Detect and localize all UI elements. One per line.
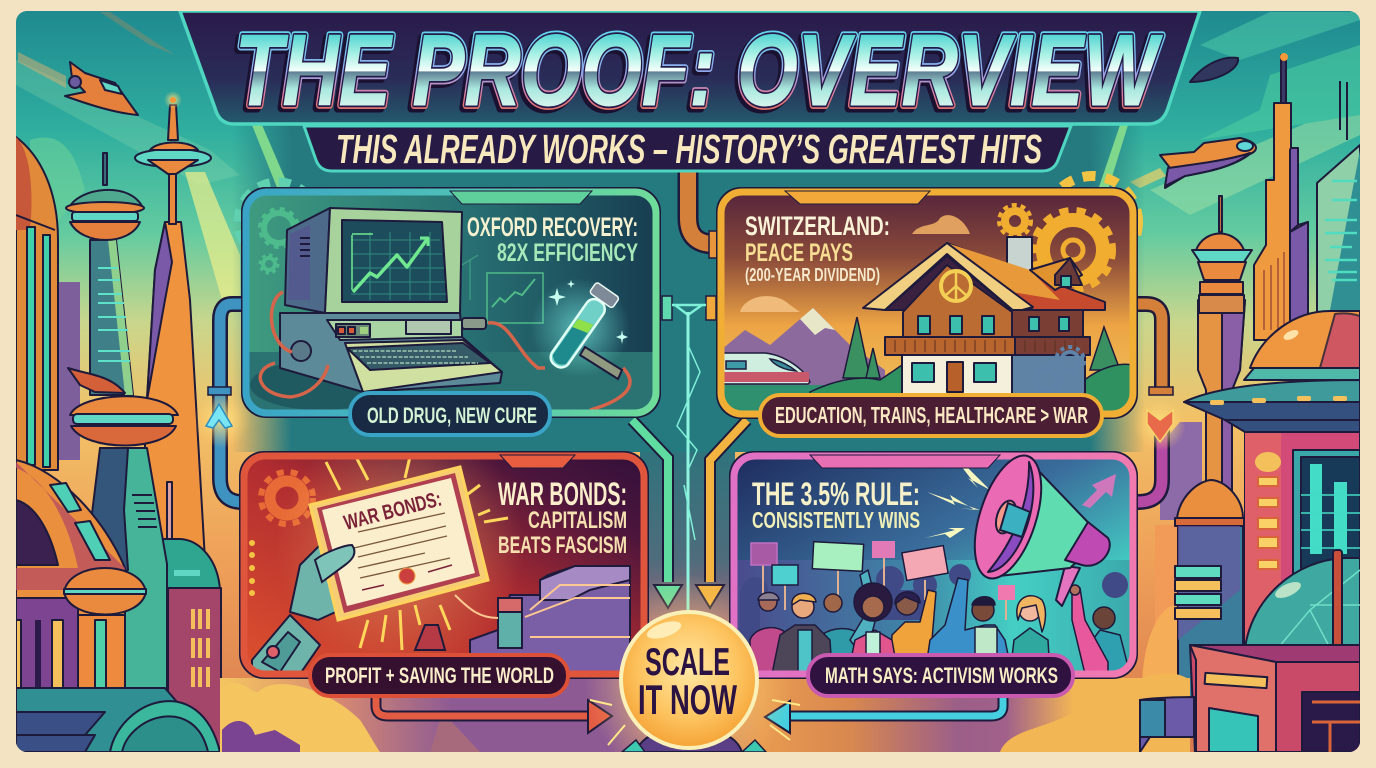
- small arrow icon: [1077, 474, 1116, 510]
- gear icons: [260, 209, 298, 273]
- caption pill: PROFIT + SAVING THE WORLD: [325, 663, 554, 688]
- spire tower: [135, 105, 211, 560]
- pole: [167, 482, 172, 540]
- computer monitor: [280, 208, 502, 392]
- frame top accent: [450, 191, 592, 204]
- small dome building: [164, 538, 222, 748]
- caption pill: MATH SAYS: ACTIVISM WORKS: [825, 663, 1058, 688]
- orb rays: [590, 700, 800, 745]
- screen chart line: [353, 238, 428, 292]
- right city: [1142, 53, 1360, 752]
- panel background: [717, 188, 1137, 418]
- computer base: [280, 313, 502, 392]
- bond certificate: [310, 467, 488, 620]
- glass dome: [1245, 549, 1360, 644]
- orb glow: [584, 575, 794, 768]
- caption pill: [760, 395, 1102, 436]
- subheading: PEACE PAYS: [745, 239, 853, 267]
- glow behind right arrow: [1134, 399, 1186, 451]
- arrow: green into orb: [632, 420, 682, 608]
- arrow: yellow into orb: [696, 420, 747, 608]
- subheading: CONSISTENTLY WINS: [752, 507, 920, 533]
- glow behind certificate: [275, 420, 525, 670]
- orb text line 2: IT NOW: [638, 676, 737, 723]
- small ufo: [1190, 58, 1238, 82]
- panel background: [242, 188, 660, 417]
- crowd background: [734, 560, 1134, 674]
- glass tower: [1317, 81, 1360, 320]
- clouds: [912, 215, 970, 234]
- certificate seal: [399, 568, 415, 584]
- vial glow: [530, 278, 630, 378]
- subheading: 82X EFFICIENCY: [497, 239, 638, 267]
- panel: War Bonds: [240, 420, 648, 696]
- subtitle banner: [304, 126, 1071, 172]
- picket signs: [751, 541, 1015, 620]
- heading: SWITZERLAND:: [745, 211, 890, 241]
- vial connector: [580, 347, 622, 379]
- subtitle banner: THIS ALREADY WORKS – HISTORY’S GREATEST HITS: [336, 126, 1042, 172]
- panel background: [730, 452, 1137, 678]
- monitor vents: [300, 238, 310, 256]
- header banner: [180, 11, 1200, 130]
- certificate lines: [354, 513, 450, 578]
- big dome saucer: [1184, 311, 1360, 432]
- panel background: [240, 452, 648, 678]
- caption pill: EDUCATION, TRAINS, HEALTHCARE > WAR: [775, 402, 1088, 428]
- frame top accent: [785, 191, 930, 204]
- orb: Scale It Now: [621, 612, 757, 748]
- ghost chart: [462, 255, 543, 323]
- people: [750, 570, 1130, 674]
- rocket ship left: [65, 62, 138, 115]
- frame top accent: [500, 455, 575, 468]
- panel frame: [721, 192, 1133, 414]
- panel frame: [246, 192, 656, 413]
- rocket ship right: [1160, 138, 1256, 188]
- orb text line 1: SCALE: [645, 641, 730, 684]
- icon: vial: [544, 282, 620, 373]
- icon: down arrow on right pipe: [1147, 410, 1173, 442]
- bottom clouds: [220, 673, 1190, 752]
- background blocks: [1160, 422, 1202, 520]
- panel: Oxford Recovery: [238, 182, 660, 435]
- teal struts: [252, 125, 1128, 190]
- plug: [462, 318, 486, 329]
- trees: [843, 317, 1120, 378]
- antenna glow: [164, 92, 182, 108]
- crowd silhouettes: [740, 564, 1128, 650]
- dots: [249, 540, 255, 596]
- pipe: left blue connector: [220, 304, 243, 502]
- sky streaks: [16, 12, 1360, 230]
- low building: [1190, 645, 1360, 752]
- keyboard: [347, 343, 490, 370]
- robot finger: [315, 545, 354, 582]
- saucer tower: [66, 153, 144, 395]
- control tower: [1192, 196, 1252, 500]
- icon: megaphone: [962, 447, 1110, 606]
- small dome building: [1175, 480, 1244, 700]
- pipe: orange top pipe: [688, 172, 718, 258]
- frame top accent: [810, 455, 1000, 468]
- panel: 3.5% Rule: [730, 445, 1137, 696]
- rays: [326, 448, 508, 650]
- certificate title: WAR BONDS:: [341, 488, 444, 535]
- panel: Switzerland: [717, 176, 1138, 436]
- lightning bolts: [925, 492, 980, 538]
- left curved building: [16, 460, 146, 690]
- top and middle background band: [232, 125, 1145, 452]
- robot hand: [252, 540, 352, 674]
- orb stand: [622, 732, 766, 752]
- frame cog: [238, 182, 318, 262]
- background block: [58, 282, 80, 460]
- train: [721, 353, 810, 384]
- gear icon: [261, 472, 313, 524]
- subheading line 2: BEATS FASCISM: [498, 532, 627, 559]
- searchlight beam: [185, 172, 240, 310]
- sparkles: [548, 280, 628, 344]
- machines: [415, 566, 630, 674]
- panel frame: [244, 456, 644, 674]
- house: [863, 237, 1105, 415]
- grey gears: [1032, 347, 1084, 395]
- icon: up arrow on left pipe: [206, 387, 232, 428]
- arrow: red into orb: [376, 698, 612, 733]
- caption pill: [310, 655, 568, 696]
- bushes: [810, 364, 1133, 415]
- caption pill: [350, 393, 550, 435]
- heading: WAR BONDS:: [498, 476, 627, 512]
- pink building: [1245, 430, 1360, 660]
- wires: [260, 292, 630, 410]
- lower center column: [640, 452, 735, 632]
- arrow: cyan into orb: [765, 698, 1003, 733]
- mountains: [721, 308, 885, 385]
- rocket trail right: [1130, 168, 1166, 188]
- bottom left pipe: [16, 688, 220, 752]
- cloud right: [1142, 605, 1177, 678]
- caption pill: [808, 655, 1073, 696]
- heading: OXFORD RECOVERY:: [467, 212, 638, 242]
- rocket trail left: [18, 52, 66, 88]
- light traces: [455, 585, 630, 637]
- low saucer tower: [68, 368, 178, 690]
- subheading: CAPITALISM: [528, 507, 627, 534]
- caption pill: OLD DRUG, NEW CURE: [367, 403, 537, 428]
- pipe: right orange magenta connector: [1137, 304, 1173, 502]
- glow behind left arrow: [196, 396, 246, 446]
- gears: [999, 205, 1112, 289]
- right pipe base: [1140, 697, 1194, 752]
- left city: [16, 91, 221, 752]
- connector with lightning: [662, 296, 716, 612]
- frame cog: [1046, 176, 1138, 268]
- panel frame: [734, 456, 1133, 674]
- heading: THE 3.5% RULE:: [752, 476, 920, 512]
- skyscraper: [1254, 53, 1308, 340]
- left dome tower: [16, 137, 58, 470]
- note: (200-YEAR DIVIDEND): [745, 265, 880, 285]
